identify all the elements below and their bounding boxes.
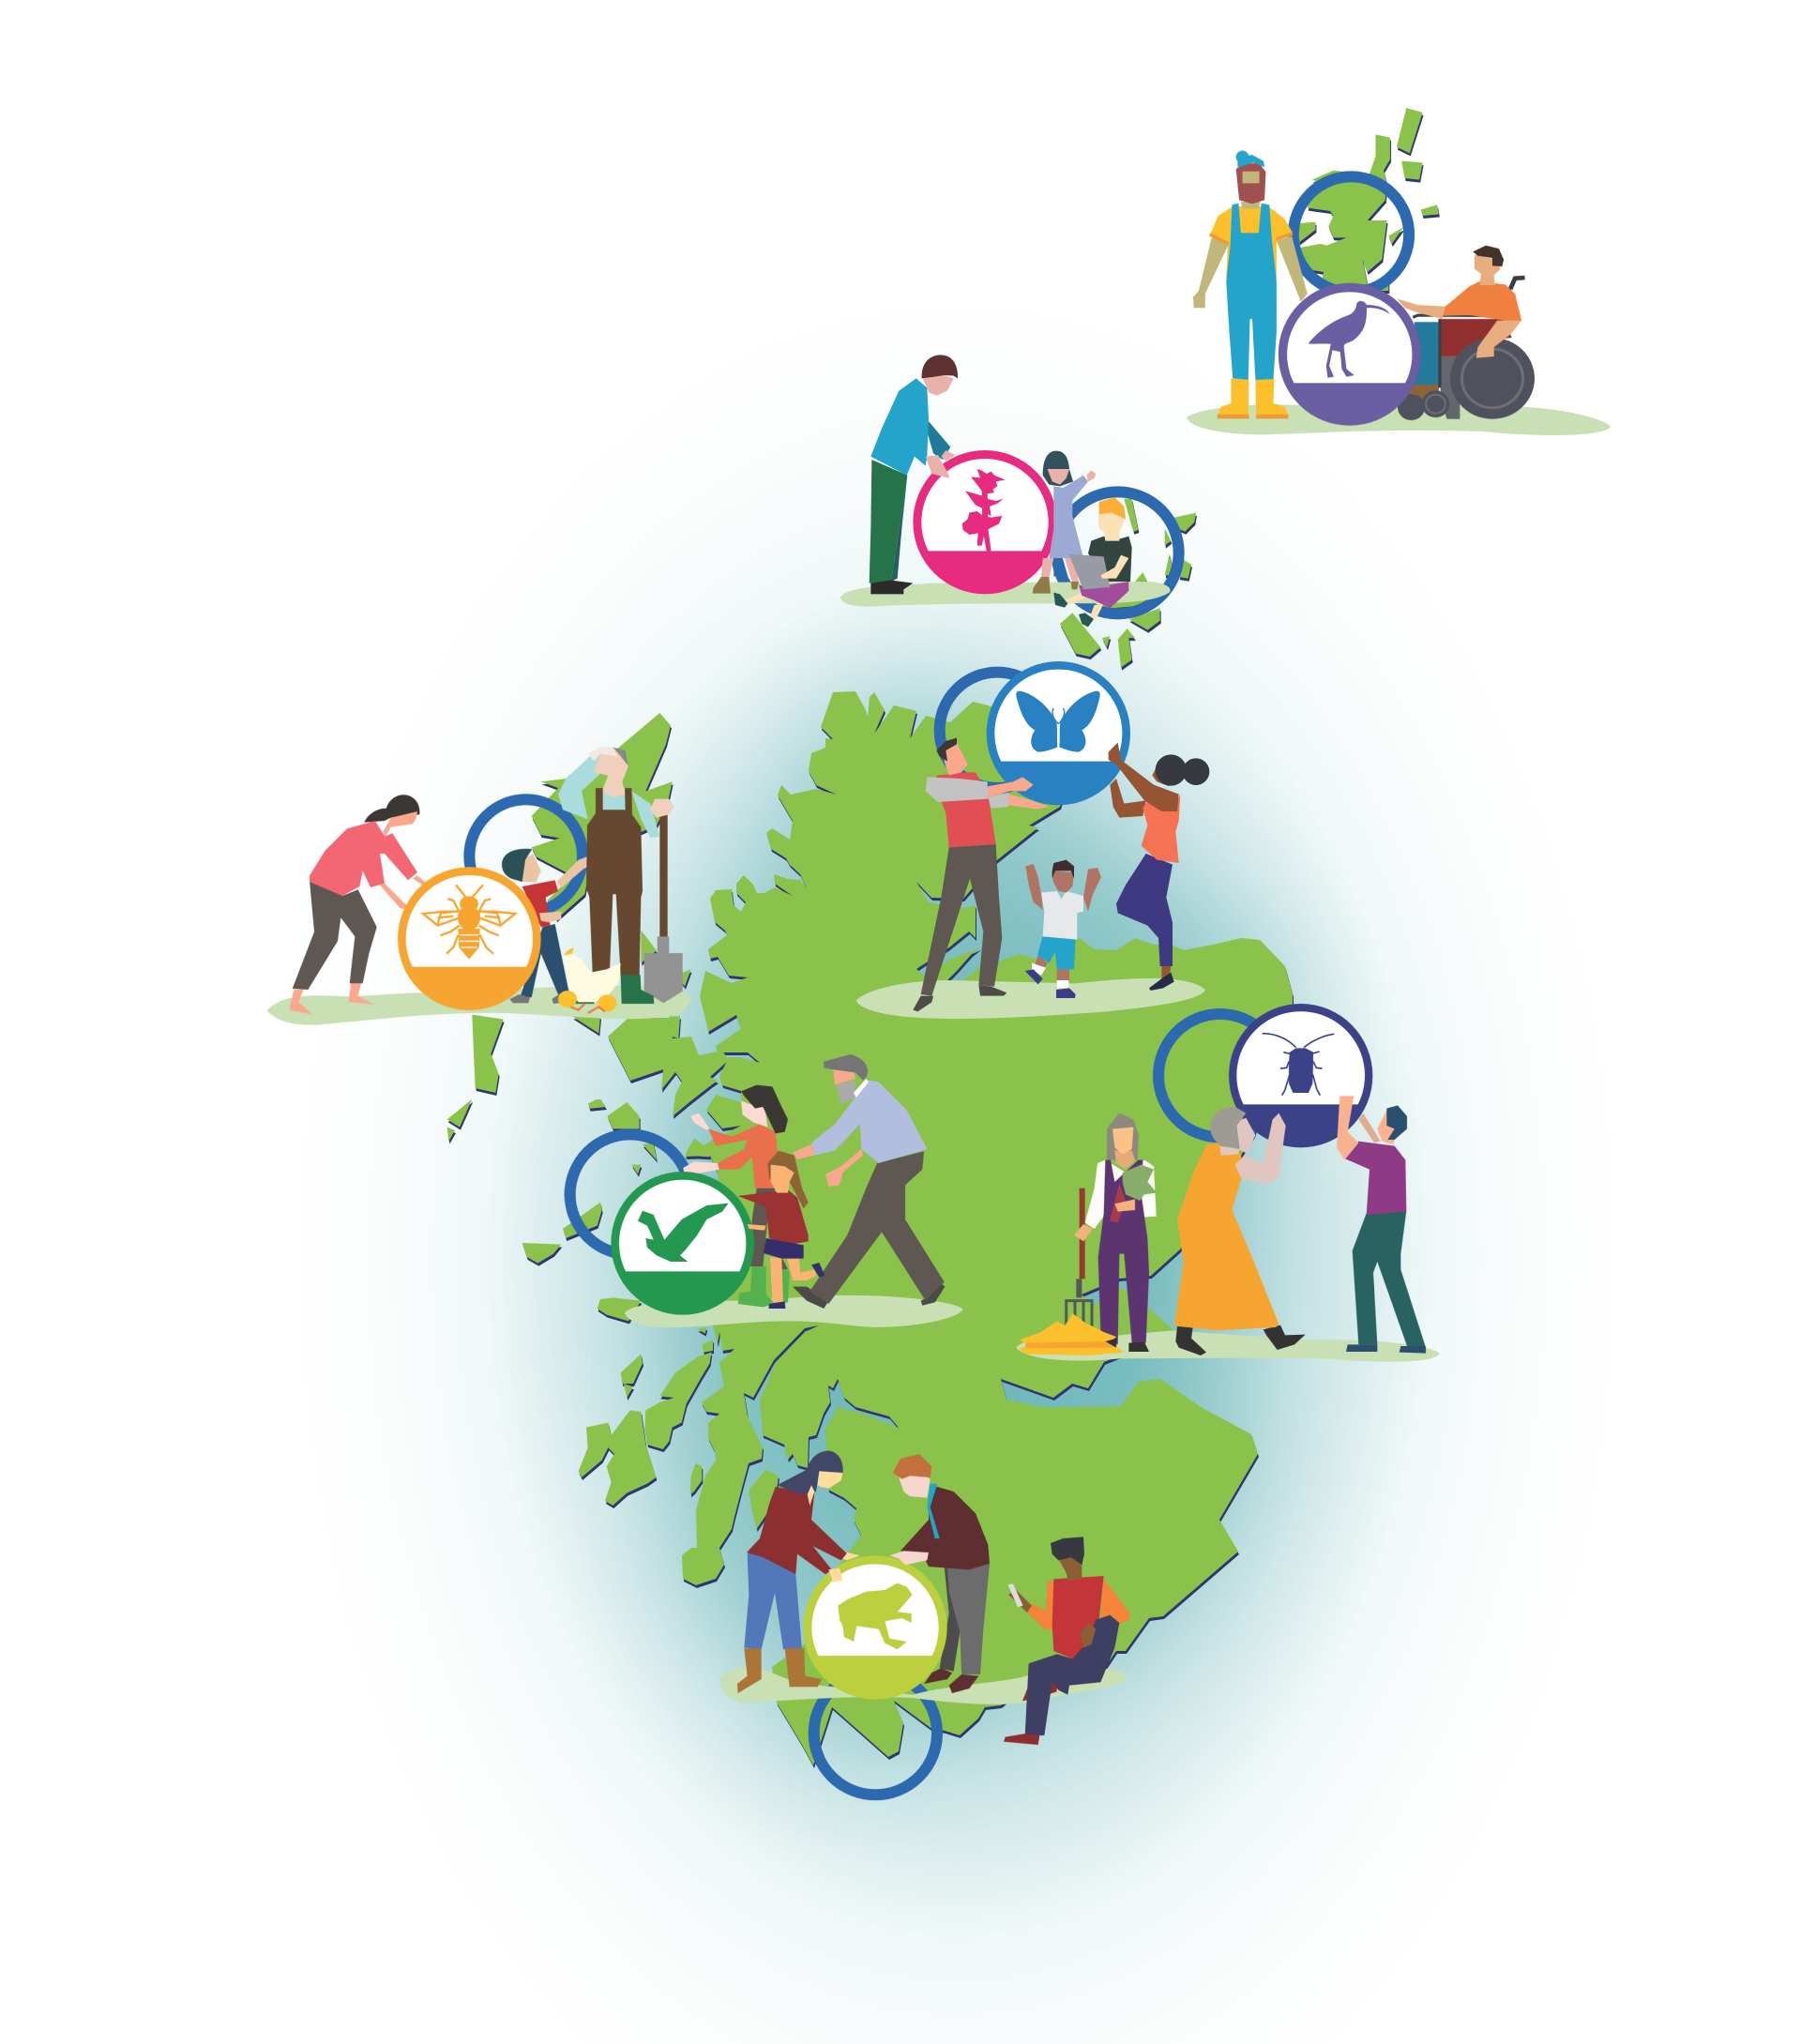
scene: west coast with bird [570,1054,963,1327]
ring [940,673,1055,788]
badge: butterfly [987,661,1130,805]
Shetland [1294,108,1439,291]
scene: east coast with beetle [1016,1004,1440,1362]
woman and girl [683,1085,790,1307]
woman in yellow dress [1174,1107,1306,1355]
ring [1158,1014,1281,1137]
scene: Orkney with plant [840,355,1179,627]
ring [1294,176,1409,293]
scene: south with frog [719,1451,1130,1794]
woman in orange top [1109,743,1209,991]
ring [570,1134,690,1254]
Orkney [1060,499,1196,668]
boy reading [1053,497,1132,627]
man in blue overalls [1193,151,1308,418]
badge: plant [913,450,1057,594]
man in purple top [1337,1096,1426,1354]
scene: Shetland with curlew [1187,151,1611,435]
man in maroon jacket [893,1454,990,1693]
mainland [682,691,1293,1765]
woman in red coat [737,1451,847,1693]
platform [1016,1330,1440,1362]
man in blue shirt [870,355,958,594]
wheelchair user [1397,246,1535,420]
person seated with phone [1004,1537,1130,1745]
platform [856,978,1205,1019]
scene: Moray with butterfly [856,661,1209,1019]
man in red top [913,738,1049,1011]
platform [266,986,690,1025]
platform [1187,404,1611,435]
badge: beetle [1229,1004,1372,1147]
man with grey beard [793,1054,945,1309]
platform [840,582,1170,607]
platform [719,1667,1127,1704]
chicken and chicks [558,947,621,1013]
Outer Hebrides and small isles [447,713,691,1142]
ring [814,1672,937,1794]
platform [625,1295,963,1327]
badge: curlew [1279,283,1421,426]
child jumping [1025,860,1101,998]
ring [1057,492,1179,613]
boy in red [502,849,592,1004]
older man with spade [558,748,683,1004]
ring [469,799,583,913]
Skye [608,1018,729,1116]
badge: frog [803,1551,947,1700]
girl in lilac dress [1033,451,1096,594]
woman with fork and beetroot [1020,1113,1157,1355]
badge: seabird [611,1172,754,1315]
woman in pink [289,795,427,1015]
badge: bee [398,867,541,1010]
girl in red top [738,1151,825,1309]
map of Scotland [447,108,1439,1765]
scene: Hebrides with bee [266,748,690,1025]
